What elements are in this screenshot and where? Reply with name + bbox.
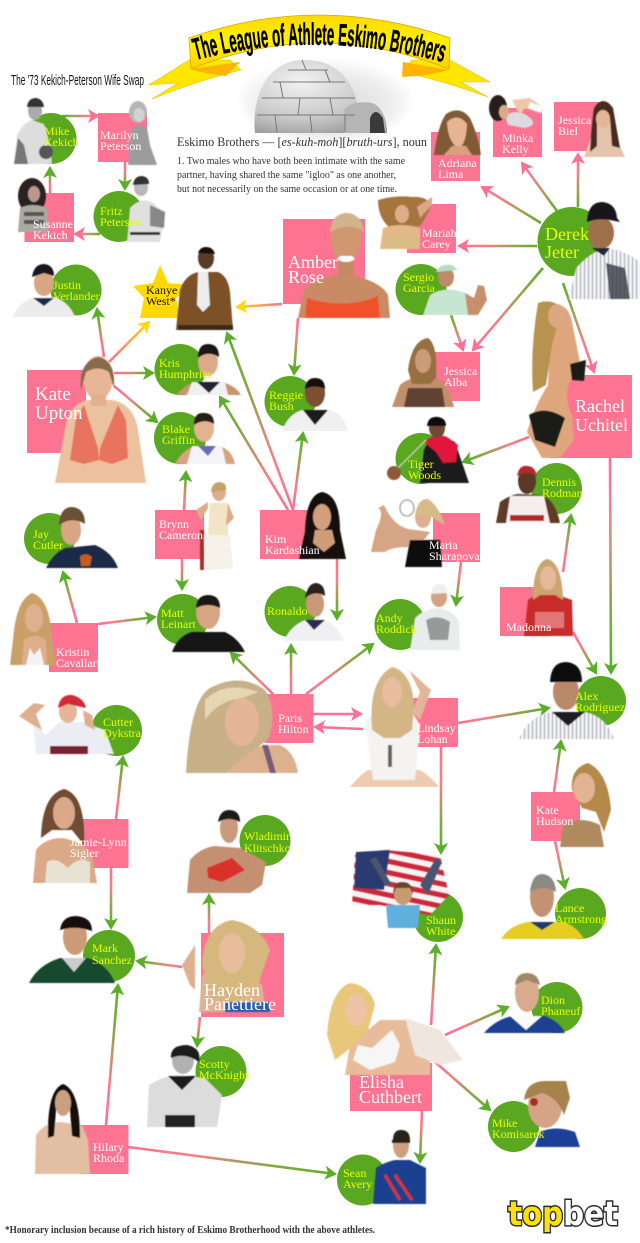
node: Lindsay Lohan: [350, 667, 458, 787]
arrow: Elisha Cuthbert to Sean Avery: [420, 1111, 422, 1162]
node: Kate Upton: [27, 356, 146, 483]
photo: Blake Griffin: [175, 413, 235, 464]
node: Adriana Lima: [431, 110, 481, 181]
label: Mike Komisarek: Komisarek: [492, 1127, 545, 1141]
label: Kristin Cavallari: Cavallari: [56, 656, 101, 670]
label: Marilyn Peterson: Peterson: [100, 139, 141, 153]
node: Justin Verlander: [13, 264, 102, 317]
label: Jessica Biel: Biel: [558, 124, 579, 138]
photo: Jamie-Lynn Sigler: [33, 789, 97, 883]
arrow: Paris Hilton to Ronaldo: [290, 645, 292, 694]
footnote: *Honorary inclusion because of a rich history of Eskimo Brotherhood with the above athletes.: [5, 1225, 375, 1236]
photo: Mike Kekich: [14, 98, 53, 164]
photo: Jessica Alba: [392, 338, 454, 407]
label: Mike Komisarek: Mike: [492, 1116, 517, 1130]
photo: Kris Humphries: [176, 344, 241, 395]
photo: Lance Armstrong: [501, 874, 584, 939]
label: Wladimir Klitschko: Klitschko: [244, 841, 291, 855]
node: Cutter Dykstra: [19, 695, 142, 756]
label: Andy Roddick: Roddick: [376, 622, 417, 636]
label: Blake Griffin: Blake: [162, 422, 190, 436]
arrow: Lindsay Lohan to Shaun White: [440, 747, 442, 853]
arrow: Derek Jeter to Jessica Alba: [473, 268, 543, 350]
subtitle: wife swap: The '73 Kekich-Peterson Wife Swap: [11, 72, 144, 89]
label: Kristin Cavallari: Kristin: [56, 645, 89, 659]
photo: Susanne Kekich: [18, 178, 49, 232]
arrow: Jamie-Lynn Sigler to Mark Sanchez: [110, 868, 112, 928]
label: Shaun White: Shaun: [426, 913, 456, 927]
label: Adriana Lima: Adriana: [438, 156, 477, 170]
label: Derek Jeter: Derek: [545, 224, 589, 244]
node: Dion Phaneuf: [484, 973, 582, 1033]
arrow: Kim Kardashian to Kris Humphries: [220, 397, 288, 510]
label: Amber Rose: Rose: [288, 267, 324, 287]
label: Jay Cutler: Jay: [33, 527, 49, 541]
label: Kanye West: West*: [146, 294, 176, 308]
photo: Hayden Panettiere: [182, 920, 270, 1012]
photo: Kim Kardashian: [299, 492, 346, 559]
arrow: Kim Kardashian to Reggie Bush: [293, 433, 303, 510]
node: Mariah Carey: [378, 196, 457, 253]
label: Elisha Cuthbert: Elisha: [359, 1072, 404, 1092]
photo: Paris Hilton: [186, 680, 298, 773]
label: Cutter Dykstra: Cutter: [103, 715, 133, 729]
arrow: Kate Upton to Justin Verlander: [97, 309, 104, 357]
photo: Lindsay Lohan: [350, 667, 439, 787]
photo: Alex Rodriguez: [519, 662, 614, 739]
arrow: Kim Kardashian to Ronaldo: [336, 559, 338, 619]
node: Mike Komisarek: [488, 1081, 580, 1152]
label: Sean Avery: Sean: [343, 1166, 366, 1180]
photo: Ronaldo: [284, 583, 344, 641]
arrow: Marilyn Peterson to Fritz Peterson: [124, 162, 126, 189]
node: Minka Kelly: [489, 95, 544, 157]
label: Derek Jeter: Jeter: [545, 242, 579, 262]
node: Marilyn Peterson: [98, 101, 157, 165]
arrow: Kate Hudson to Lance Armstrong: [555, 841, 565, 888]
node: Elisha Cuthbert: [327, 983, 463, 1111]
photo: Marilyn Peterson: [128, 101, 157, 165]
node: Lance Armstrong: [501, 874, 607, 939]
photo: Derek Jeter: [569, 202, 640, 299]
photo: Dion Phaneuf: [484, 973, 565, 1033]
arrow: Hilary Rhoda to Mark Sanchez: [106, 985, 118, 1125]
node: Dennis Rodman: [496, 463, 583, 523]
label: Hilary Rhoda: Rhoda: [93, 1151, 125, 1165]
label: Sean Avery: Avery: [343, 1177, 372, 1191]
label: Kanye West: Kanye: [146, 283, 177, 297]
label: Sergio Garcia: Sergio: [403, 270, 434, 284]
banner: [148, 14, 490, 100]
photo: Kristin Cavallari: [10, 593, 56, 665]
label: Minka Kelly: Minka: [502, 131, 534, 145]
arrow: Lindsay Lohan to Alex Rodriguez: [458, 708, 549, 723]
arrow: Derek Jeter to Minka Kelly: [522, 163, 557, 211]
label: Hayden Panettiere: Panettiere: [204, 994, 276, 1014]
label: Fritz Peterson: Fritz: [100, 204, 123, 218]
label: Kate Hudson: Kate: [536, 803, 559, 817]
label: Dennis Rodman: Dennis: [542, 475, 576, 489]
arrow: Amber Rose to Kanye West: [237, 304, 282, 307]
photo: Sean Avery: [373, 1130, 426, 1204]
igloo illustration: [240, 58, 410, 142]
photo: Rachel Uchitel: [527, 301, 586, 458]
label: Mike Kekich: Kekich: [44, 135, 79, 149]
logo: topbet: topbet: [508, 1194, 618, 1233]
icon: star: [133, 265, 192, 318]
node: Wladimir Klitschko: [187, 810, 291, 893]
arrow: Rachel Uchitel to Tiger Woods: [463, 437, 529, 462]
photo: Jay Cutler: [46, 507, 118, 568]
label: Ronaldo: Ronaldo: [267, 604, 308, 618]
node: Tiger Woods: [387, 417, 469, 484]
banner title: The League of Athlete Eskimo Brothers: [190, 22, 446, 62]
node: Kris Humphries: [154, 344, 241, 395]
photo: Andy Roddick: [410, 584, 460, 650]
arrow: Fritz Peterson to Susanne Kekich: [75, 233, 100, 235]
label: Dion Phaneuf: Phaneuf: [541, 1004, 580, 1018]
node: Rachel Uchitel: [527, 301, 632, 458]
arrow: Paris Hilton to Andy Roddick: [306, 644, 373, 694]
label: Jessica Biel: Jessica: [558, 113, 592, 127]
definition: term: Eskimo Brothers — [es-kuh-moh][bruth-urs], noun: [177, 134, 427, 149]
node: Shaun White: [352, 850, 463, 942]
label: Jay Cutler: Cutler: [33, 538, 63, 552]
photo: Adriana Lima: [434, 110, 481, 155]
arrow: Kate Upton to Blake Griffin: [114, 386, 157, 422]
photo: Tiger Woods: [387, 417, 469, 483]
photo: Cutter Dykstra: [19, 695, 114, 754]
photo: Sergio Garcia: [423, 265, 487, 315]
photo: Kate Hudson: [560, 763, 611, 847]
label: Justin Verlander: Verlander: [53, 289, 100, 303]
node: Kim Kardashian: [260, 492, 346, 559]
photo: Elisha Cuthbert: [327, 983, 463, 1075]
arrow: Derek Jeter to Adriana Lima: [482, 187, 541, 223]
label: Alex Rodriguez: Rodriguez: [575, 700, 625, 714]
arrow: Jamie-Lynn Sigler to Cutter Dykstra: [116, 757, 123, 819]
label: Tiger Woods: Tiger: [408, 457, 434, 471]
label: Elisha Cuthbert: Cuthbert: [359, 1087, 422, 1107]
label: Susanne Kekich: Kekich: [33, 228, 68, 242]
arrow: Sergio Garcia to Jessica Alba: [451, 315, 463, 350]
label: Lance Armstrong: Lance: [555, 901, 584, 915]
label: Scotty McKnight: Scotty: [199, 1057, 230, 1071]
arrow: Susanne Kekich to Mike Kekich: [49, 168, 51, 193]
node: Brynn Cameron: [155, 482, 234, 571]
arrow: Kim Kardashian to Kanye West: [227, 333, 293, 510]
node: Kanye West: [133, 247, 233, 330]
label: Kim Kardashian: Kim: [265, 532, 287, 546]
label: Susanne Kekich: Susanne: [33, 217, 73, 231]
arrow: Kate Upton to Kanye West: [109, 322, 149, 362]
label: Kris Humphries: Humphries: [159, 367, 213, 381]
label: Paris Hilton: Paris: [278, 711, 302, 725]
photo: Fritz Peterson: [127, 176, 165, 242]
label: Jamie-Lynn Sigler: Jamie-Lynn: [70, 835, 127, 849]
arrow: Kristin Cavallari to Jay Cutler: [63, 572, 77, 623]
photo: Wladimir Klitschko: [187, 810, 266, 893]
arrow: Elisha Cuthbert to Mike Komisarek: [435, 1062, 490, 1110]
label: Reggie Bush: Reggie: [269, 388, 303, 402]
photo: Matt Leinart: [172, 595, 245, 652]
label: Kris Humphries: Kris: [159, 356, 180, 370]
arrow: Hayden Panettiere to Wladimir Klitschko: [208, 895, 210, 933]
node: Andy Roddick: [374, 584, 460, 650]
label: Mark Sanchez: Mark: [92, 941, 118, 955]
node: Alex Rodriguez: [519, 662, 626, 739]
label: Fritz Peterson: Peterson: [100, 215, 141, 229]
label: Mariah Carey: Carey: [422, 237, 451, 251]
photo: Maria Sharapova: [371, 499, 445, 567]
node: Sean Avery: [337, 1130, 426, 1206]
node: Blake Griffin: [154, 412, 235, 464]
label: Hilary Rhoda: Hilary: [93, 1140, 124, 1154]
photo: Shaun White: [352, 850, 449, 928]
label: Tiger Woods: Woods: [408, 468, 441, 482]
label: Marilyn Peterson: Marilyn: [100, 128, 139, 142]
node: Amber Rose: [283, 213, 390, 318]
arrow: Mike Kekich to Marilyn Peterson: [62, 115, 98, 117]
label: Lindsay Lohan: Lohan: [417, 732, 448, 746]
photo: Mark Sanchez: [29, 916, 115, 983]
arrow: Rachel Uchitel to Alex Rodriguez: [610, 458, 611, 673]
label: Matt Leinart: Leinart: [161, 617, 196, 631]
label: Dennis Rodman: Rodman: [542, 486, 583, 500]
label: Scotty McKnight: McKnight: [199, 1068, 249, 1082]
label: Mark Sanchez: Sanchez: [92, 953, 132, 967]
photo: Brynn Cameron: [196, 482, 234, 571]
photo: Mike Komisarek: [524, 1081, 580, 1147]
node: Madonna: [500, 559, 573, 636]
definition: text: 1. Two males who have both been intimate with the same: [177, 156, 405, 167]
label: Shaun White: White: [426, 924, 455, 938]
definition: text: [177, 156, 405, 195]
arrow: Hayden Panettiere to Mark Sanchez: [137, 961, 182, 967]
arrows: [50, 116, 611, 1174]
arrow: Derek Jeter to Rachel Uchitel: [563, 283, 594, 372]
label: Brynn Cameron: Cameron: [159, 528, 203, 542]
arrow: Kristin Cavallari to Matt Leinart: [98, 617, 155, 624]
arrow: Maria Sharapova to Andy Roddick: [456, 562, 461, 605]
photo: Minka Kelly: [489, 95, 544, 128]
arrow: Kate Hudson to Alex Rodriguez: [554, 741, 561, 792]
photo: Justin Verlander: [13, 264, 75, 317]
photo: Dennis Rodman: [496, 466, 560, 523]
photo: Reggie Bush: [282, 378, 348, 431]
label: Hayden Panettiere: Hayden: [204, 980, 260, 1000]
node: Mark Sanchez: [29, 916, 135, 983]
label: Jamie-Lynn Sigler: Sigler: [70, 846, 99, 860]
node: Ronaldo: [264, 583, 344, 641]
label: Rachel Uchitel: Uchitel: [575, 415, 628, 435]
node: Hayden Panettiere: [182, 920, 284, 1017]
label: Mariah Carey: Mariah: [422, 226, 457, 240]
label: Jessica Alba: Alba: [444, 375, 468, 389]
node: Maria Sharapova: [371, 499, 480, 567]
label: Lance Armstrong: Armstrong: [555, 912, 607, 926]
label: Wladimir Klitschko: Wladimir: [244, 829, 290, 843]
label: Blake Griffin: Griffin: [162, 433, 195, 447]
node: Jamie-Lynn Sigler: [33, 789, 128, 883]
photo: Kanye West: [176, 247, 233, 330]
node: Jay Cutler: [24, 507, 118, 568]
photo: Hilary Rhoda: [35, 1084, 90, 1174]
node: Matt Leinart: [157, 594, 245, 652]
label: Paris Hilton: Hilton: [278, 722, 309, 736]
photo: Jessica Biel: [584, 101, 625, 157]
node: Susanne Kekich: [18, 178, 74, 242]
arrow: Elisha Cuthbert to Dion Phaneuf: [445, 1007, 508, 1035]
photo: Amber Rose: [298, 213, 390, 318]
label: Brynn Cameron: Brynn: [159, 517, 189, 531]
arrow: Elisha Cuthbert to Shaun White: [431, 945, 436, 1025]
node: Kristin Cavallari: [10, 593, 101, 672]
label: Minka Kelly: Kelly: [502, 142, 529, 156]
photo: Scotty McKnight: [147, 1045, 222, 1127]
arrow: Kate Upton to Kris Humphries: [114, 372, 153, 374]
node: Jessica Alba: [392, 338, 480, 407]
label: Rachel Uchitel: Rachel: [575, 396, 625, 416]
arrow: Hilary Rhoda to Sean Avery: [128, 1147, 335, 1174]
definition: text: but not necessarily on the same occasion or at one time.: [177, 184, 397, 195]
label: Jessica Alba: Jessica: [444, 364, 478, 378]
label: Madonna: Madonna: [506, 620, 552, 634]
node: Paris Hilton: [186, 680, 314, 773]
photo: Mariah Carey: [378, 196, 432, 249]
label: Kate Hudson: Hudson: [536, 814, 573, 828]
arrow: Lindsay Lohan to Paris Hilton: [315, 727, 363, 729]
definition: text: partner, having shared the same "igloo" as one another,: [177, 170, 396, 181]
node: Scotty McKnight: [147, 1045, 249, 1127]
arrow: Madonna to Alex Rodriguez: [573, 632, 596, 673]
label: Dion Phaneuf: Dion: [541, 993, 565, 1007]
label: Matt Leinart: Matt: [161, 606, 184, 620]
label: Kate Upton: Kate: [35, 384, 71, 405]
arrow: Paris Hilton to Matt Leinart: [231, 653, 273, 694]
arrow: Paris Hilton to Lindsay Lohan: [313, 713, 361, 715]
label: Kim Kardashian: Kardashian: [265, 543, 320, 557]
label: Lindsay Lohan: Lindsay: [417, 721, 456, 735]
label: Maria Sharapova: Maria: [429, 538, 458, 552]
node: Kate Hudson: [531, 763, 611, 847]
label: Adriana Lima: Lima: [438, 167, 464, 181]
label: Alex Rodriguez: Alex: [575, 689, 598, 703]
arrow: Derek Jeter to Mariah Carey: [459, 245, 537, 247]
node: Reggie Bush: [264, 376, 348, 431]
label: Justin Verlander: Justin: [53, 278, 81, 292]
node: Mike Kekich: [14, 98, 79, 164]
photo: Madonna: [524, 559, 573, 636]
photo: Kate Upton: [55, 356, 146, 483]
label: Amber Rose: Amber: [288, 252, 338, 272]
label: Reggie Bush: Bush: [269, 399, 294, 413]
label: Sergio Garcia: Garcia: [403, 281, 436, 295]
label: Maria Sharapova: Sharapova: [429, 549, 480, 563]
node: Jessica Biel: [554, 101, 625, 157]
arrow: Hayden Panettiere to Scotty McKnight: [197, 1017, 200, 1046]
node: Hilary Rhoda: [35, 1084, 128, 1174]
node: Derek Jeter: [538, 202, 640, 299]
node: Sergio Garcia: [396, 264, 487, 315]
arrow: Brynn Cameron to Matt Leinart: [181, 559, 183, 589]
label: Cutter Dykstra: Dykstra: [103, 726, 142, 740]
label: Mike Kekich: Mike: [44, 124, 69, 138]
arrow: Derek Jeter to Jessica Biel: [577, 154, 579, 207]
arrow: Madonna to Dennis Rodman: [563, 515, 571, 572]
node: Fritz Peterson: [94, 176, 165, 242]
arrow: Brynn Cameron to Blake Griffin: [184, 472, 186, 510]
label: Kate Upton: Upton: [35, 403, 83, 424]
label: Andy Roddick: Andy: [376, 611, 403, 625]
arrow: Amber Rose to Reggie Bush: [294, 318, 298, 374]
